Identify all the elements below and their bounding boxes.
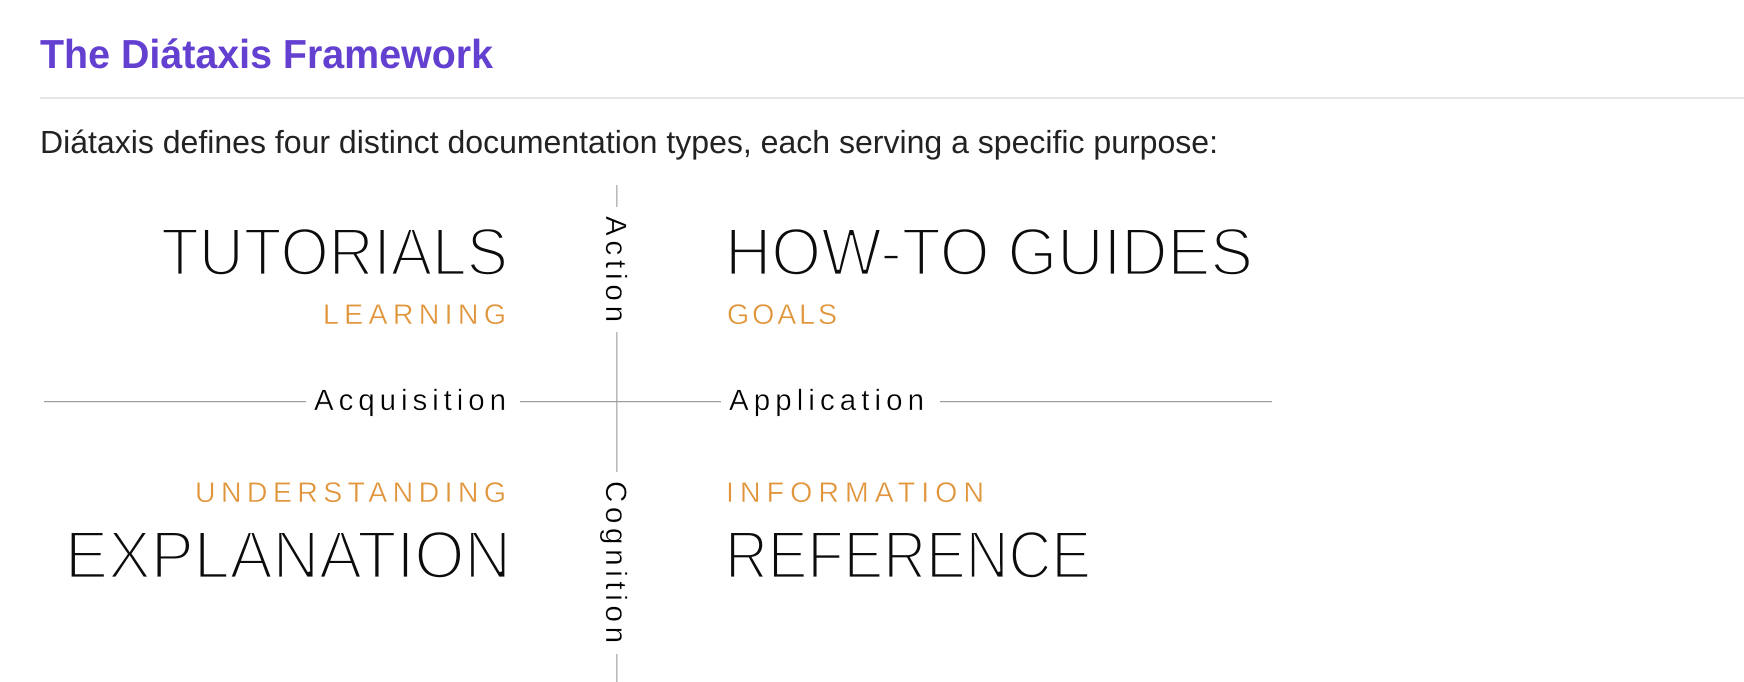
title: The Diátaxis Framework (40, 31, 493, 77)
quadrant: how-to guides: HOW-TO GUIDES (725, 215, 1253, 290)
axis label: cognition: Cognition (599, 481, 632, 643)
quadrant: explanation: UNDERSTANDING (195, 477, 506, 509)
quadrant: how-to guides (725, 215, 1253, 331)
quadrant: explanation: EXPLANATION (65, 518, 511, 593)
axis label: application: Application (729, 384, 924, 417)
axis label: action: Action (599, 216, 632, 322)
quadrant: reference (725, 477, 1091, 593)
axis label: acquisition: Acquisition (314, 384, 506, 417)
quadrant: explanation (65, 477, 511, 593)
quadrant: reference: REFERENCE (725, 518, 1091, 593)
quadrant: how-to guides: GOALS (727, 299, 837, 331)
quadrant diagram (44, 185, 1272, 682)
intro text: Diátaxis defines four distinct documentation types, each serving a specific purpose: (40, 124, 1218, 160)
quadrant: tutorials: TUTORIALS (161, 215, 508, 290)
quadrant: reference: INFORMATION (726, 477, 984, 509)
quadrant: tutorials (161, 215, 508, 331)
quadrant: tutorials: LEARNING (323, 299, 506, 331)
